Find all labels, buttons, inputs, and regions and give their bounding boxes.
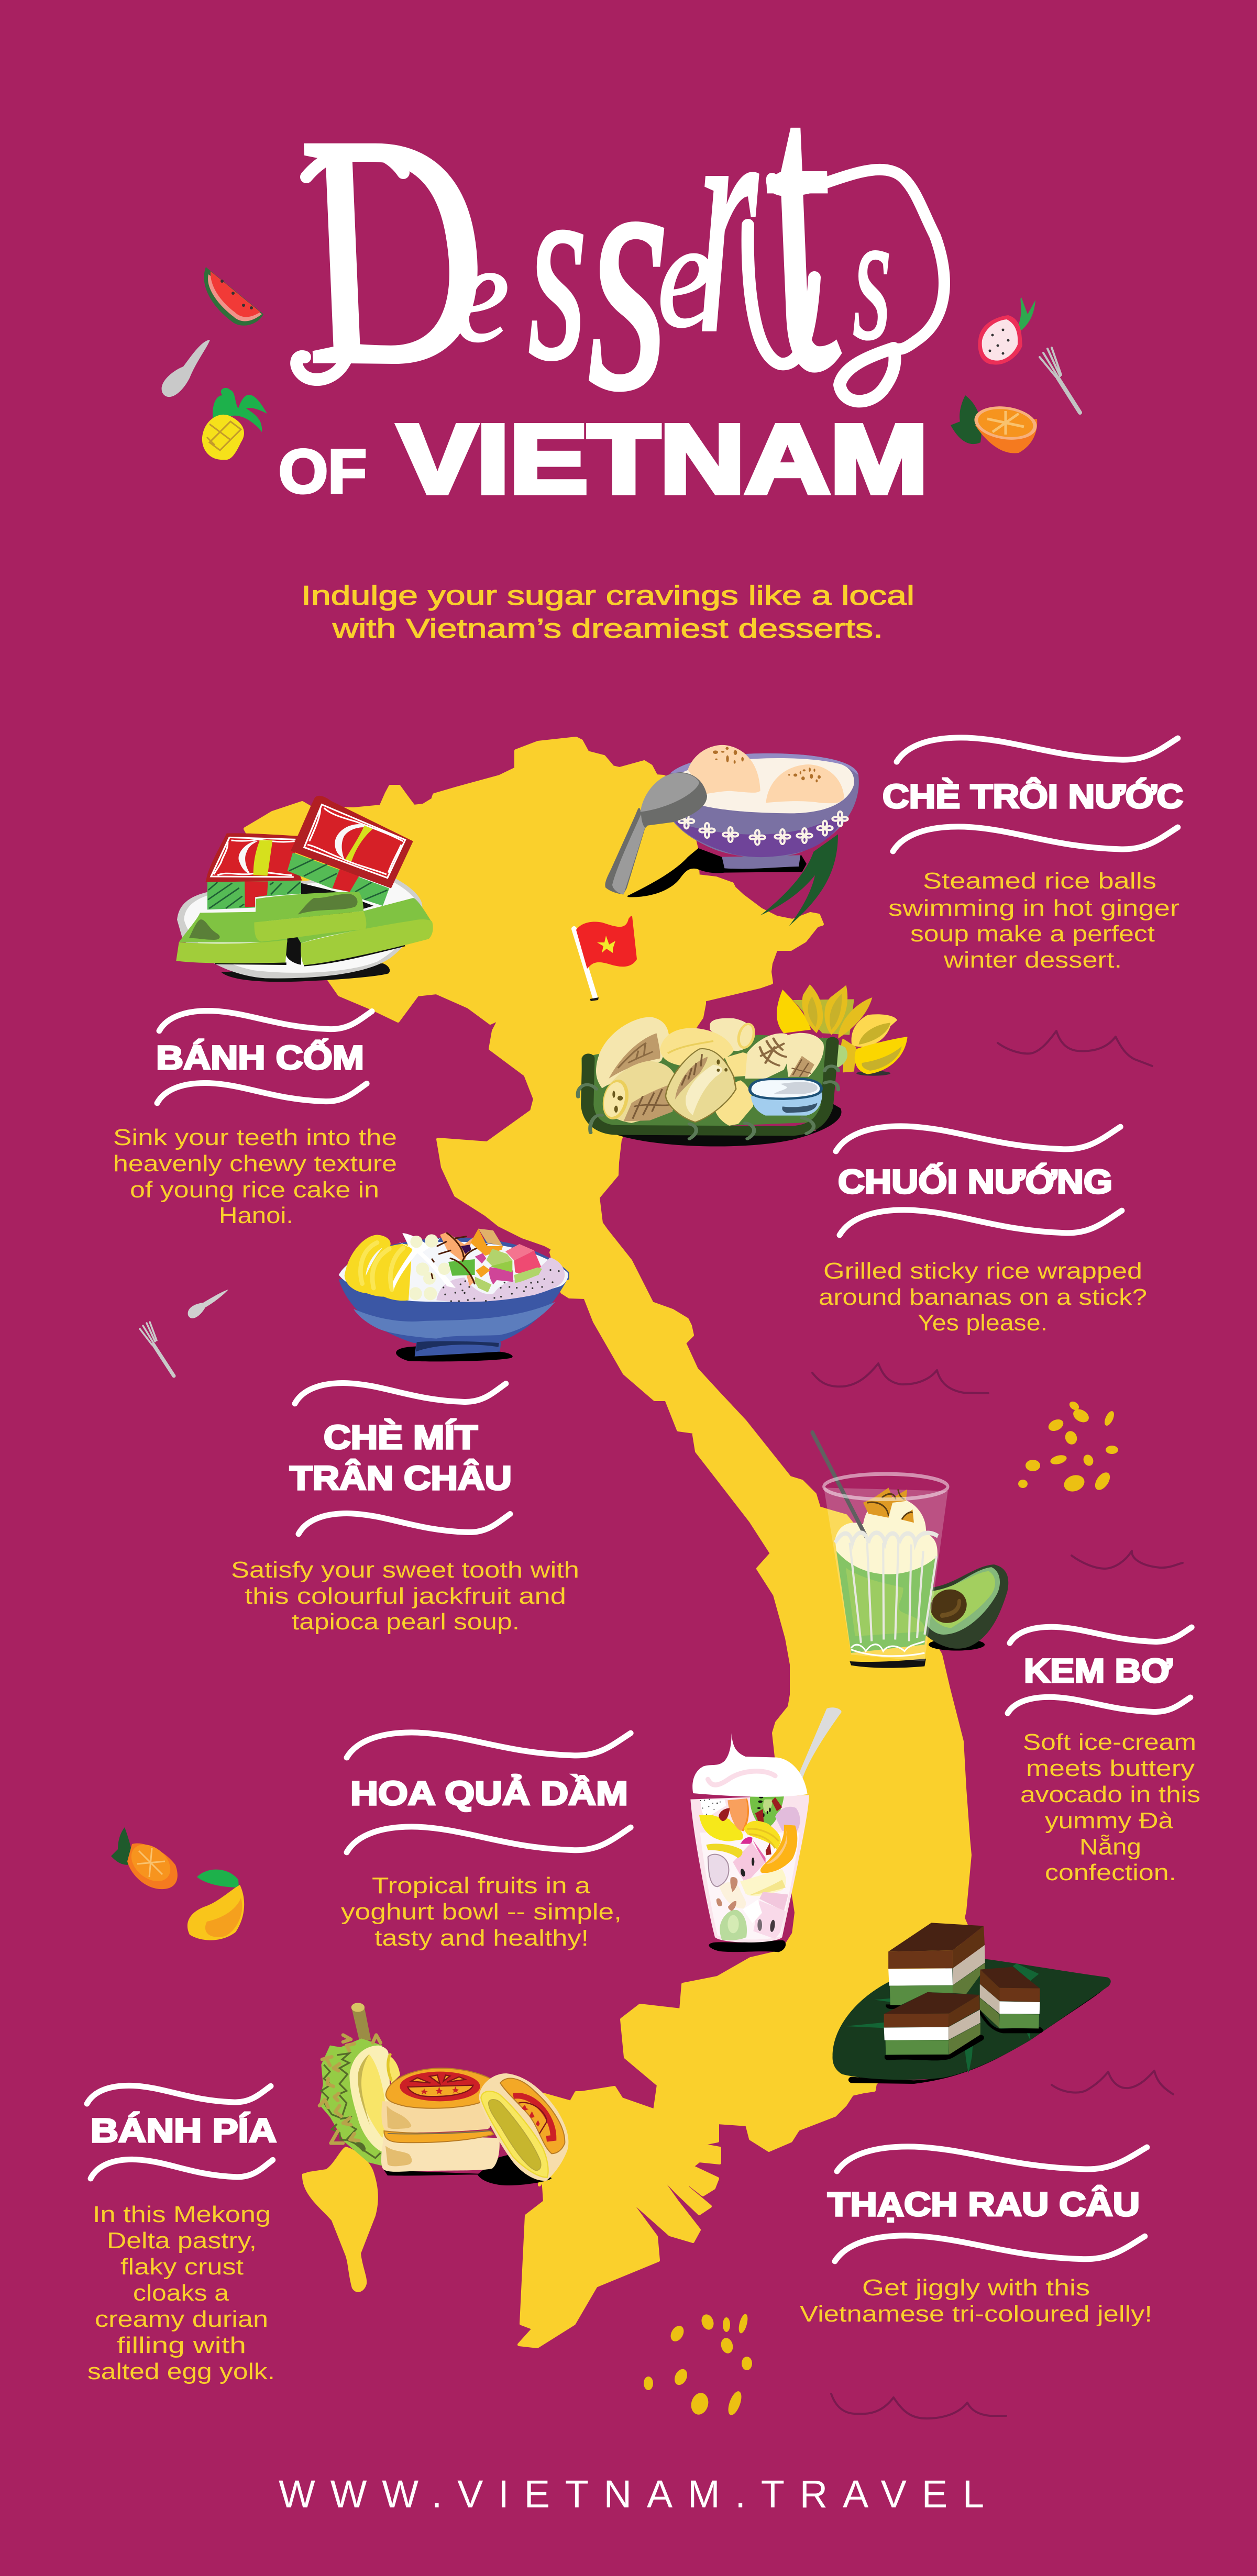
description: Soft ice-cream — [1023, 1729, 1196, 1755]
tray — [581, 1035, 836, 1131]
illustration: banh pia and durian — [319, 2003, 568, 2185]
cake shadows — [885, 2004, 1043, 2060]
description — [888, 868, 1179, 973]
icon: spoon small — [188, 1290, 228, 1318]
description: Tropical fruits in a — [372, 1873, 591, 1898]
spoon and bowl shadow — [627, 848, 807, 897]
heading: Vietnam: VIETNAM — [398, 405, 928, 514]
description — [341, 1873, 622, 1951]
heading: Desserts: s — [588, 79, 669, 462]
illustration: chuoi nuong tray — [578, 984, 908, 1147]
map of Vietnam — [245, 738, 970, 2347]
decorative swash top — [295, 1383, 506, 1404]
description: Grilled sticky rice wrapped — [823, 1258, 1142, 1284]
description: Nẵng — [1079, 1834, 1141, 1860]
decorative swash bottom — [893, 827, 1178, 851]
icon: dragon fruit — [978, 297, 1035, 365]
panel: hoa qua dam — [341, 1733, 631, 1951]
fruit pieces — [699, 1792, 800, 1940]
heading: CHÈ TRÔI NƯỚC — [883, 777, 1183, 815]
pastry stamp — [400, 2072, 480, 2101]
description — [800, 2275, 1152, 2327]
illustration: hoa qua dam glass — [690, 1707, 842, 1952]
heading: CHUỐI NƯỚNG — [838, 1163, 1112, 1201]
cut pastry — [479, 2073, 568, 2181]
decorative swash bottom — [835, 2236, 1145, 2261]
avocado — [923, 1564, 1008, 1651]
icon: watermelon — [204, 267, 263, 326]
heading: Desserts: e — [454, 215, 510, 371]
subtitle — [301, 581, 914, 644]
description: confection. — [1045, 1860, 1176, 1885]
decorative crumbs upper — [1018, 1400, 1118, 1494]
plate shadow — [221, 963, 390, 982]
panel: che troi nuoc — [883, 738, 1183, 973]
heading: Desserts: t — [730, 0, 869, 457]
heading: Desserts: D — [262, 68, 512, 433]
decorative swash top — [1010, 1627, 1192, 1643]
description: Satisfy your sweet tooth with — [231, 1557, 579, 1583]
decorative swash bottom — [347, 1827, 631, 1852]
banana leaf — [833, 1959, 1111, 2080]
leaf shadow — [848, 1981, 1110, 2084]
left wrapped cake — [205, 833, 302, 909]
panel: banh pia — [87, 2085, 277, 2384]
bowl foot — [722, 855, 800, 869]
panel: thach rau cau — [800, 2147, 1152, 2327]
bowl rim — [670, 753, 858, 775]
decorative crumbs lower — [644, 2313, 752, 2417]
illustration: che troi nuoc bowl — [605, 745, 859, 926]
icon: mango — [188, 1870, 244, 1940]
description: this colourful jackfruit and — [245, 1583, 566, 1609]
decorative swash top — [836, 1126, 1120, 1151]
dipping bowl — [750, 1079, 822, 1116]
decorative swash bottom — [157, 1083, 367, 1103]
description — [819, 1258, 1147, 1336]
heading: Desserts: e — [657, 191, 713, 359]
glass shadow — [850, 1659, 926, 1668]
bowl body — [669, 753, 859, 858]
description: creamy durian — [95, 2306, 268, 2332]
rice ball right — [766, 764, 844, 803]
nut topping — [863, 1487, 914, 1523]
cake front — [884, 1992, 980, 2055]
heading: CHÈ MÍT — [324, 1418, 478, 1456]
bowl shadow — [396, 1347, 513, 1361]
decorative swash top — [897, 738, 1178, 762]
green rice cakes — [176, 892, 433, 965]
description: heavenly chewy texture — [113, 1151, 397, 1176]
icon: fork small — [140, 1322, 174, 1376]
description: around bananas on a stick? — [819, 1284, 1147, 1310]
right wrapped cake — [288, 796, 413, 906]
icon: Vietnamese flag — [574, 916, 637, 1001]
description: swimming in hot ginger — [888, 895, 1179, 921]
description: filling with — [117, 2333, 246, 2358]
heading: BÁNH CỐM — [156, 1039, 364, 1076]
whipped cream — [692, 1733, 808, 1797]
description: flaky crust — [120, 2254, 244, 2280]
heading: Desserts: r — [697, 35, 760, 401]
dessert filling — [339, 1229, 568, 1302]
decorative swash bottom — [91, 2159, 273, 2179]
icon: spoon — [162, 340, 210, 397]
description: of young rice cake in — [130, 1177, 379, 1203]
illustration: che mit tran chau bowl — [339, 1229, 569, 1361]
heading: TRÂN CHÂU — [290, 1459, 512, 1497]
description: Steamed rice balls — [923, 868, 1156, 894]
description: yummy Đà — [1045, 1808, 1174, 1834]
illustration: kem bo glass and avocado — [812, 1433, 1008, 1668]
panel: chuoi nuong — [819, 1126, 1147, 1336]
panel: kem bo — [1008, 1627, 1200, 1885]
stacked pastry — [381, 2068, 500, 2172]
heading: BÁNH PÍA — [91, 2112, 277, 2149]
heading: HOA QUẢ DẦM — [350, 1774, 628, 1812]
bowl — [339, 1237, 569, 1357]
heading: Desserts: s — [853, 174, 891, 377]
description: yoghurt bowl -- simple, — [341, 1899, 622, 1925]
tray shadow — [615, 1103, 842, 1147]
subtitle: Indulge your sugar cravings like a local — [301, 581, 914, 611]
decorative swash top — [159, 1011, 372, 1031]
glass — [690, 1795, 809, 1942]
description: cloaks a — [133, 2280, 229, 2306]
description: Vietnamese tri-coloured jelly! — [800, 2301, 1152, 2327]
description: meets buttery — [1026, 1756, 1195, 1781]
subtitle: with Vietnam’s dreamiest desserts. — [332, 614, 883, 644]
description: Delta pastry, — [107, 2228, 257, 2253]
icon: orange — [951, 395, 1039, 453]
description: tasty and healthy! — [374, 1925, 589, 1951]
description: salted egg yolk. — [87, 2359, 275, 2384]
description — [87, 2202, 275, 2384]
banana bunch — [777, 984, 908, 1076]
description: soup make a perfect — [910, 921, 1155, 947]
durian — [319, 2003, 400, 2166]
grilled bananas — [596, 1017, 824, 1126]
pandan leaves — [760, 834, 838, 926]
heading: of: OF — [279, 437, 367, 506]
decorative swash top — [837, 2147, 1147, 2171]
glass shadow — [709, 1940, 786, 1952]
cake back — [888, 1923, 985, 2005]
heading — [290, 1418, 512, 1497]
icon: orange small — [111, 1827, 178, 1889]
panel: che mit tran chau — [231, 1383, 579, 1635]
description: winter dessert. — [943, 947, 1122, 973]
drink — [824, 1487, 948, 1661]
pastry shadow — [384, 2155, 552, 2185]
heading: Desserts: s — [528, 119, 587, 415]
description: In this Mekong — [93, 2202, 271, 2227]
illustration: thach rau cau jelly on leaf — [833, 1923, 1111, 2084]
description: Get jiggly with this — [862, 2275, 1090, 2301]
spoon — [812, 1433, 866, 1536]
description: tapioca pearl soup. — [292, 1609, 520, 1635]
footer url: WWW.VIETNAM.TRAVEL — [279, 2472, 984, 2516]
spoon — [786, 1707, 842, 1805]
plate — [177, 873, 422, 979]
icon: fork — [1040, 348, 1080, 413]
icon: pineapple — [202, 388, 267, 460]
glass flutes and rim — [824, 1474, 948, 1656]
soup — [682, 758, 854, 813]
description — [113, 1125, 397, 1228]
description: Hanoi. — [219, 1203, 293, 1228]
leaf spikes — [845, 1963, 1039, 2073]
decorative swash top — [87, 2085, 271, 2104]
purple band — [674, 813, 843, 857]
panel: banh com — [113, 1011, 397, 1228]
cake right — [980, 1967, 1040, 2028]
description: avocado in this — [1020, 1782, 1200, 1807]
description — [1020, 1729, 1200, 1885]
description — [231, 1557, 579, 1635]
heading: Desserts — [262, 0, 944, 462]
heading: THẠCH RAU CÂU — [828, 2185, 1140, 2223]
rice ball left — [688, 745, 760, 794]
decorative swash top — [347, 1733, 631, 1758]
spoon — [605, 772, 707, 894]
flower pattern — [679, 812, 848, 845]
illustration: banh com plate — [176, 796, 433, 982]
heading: KEM BƠ — [1024, 1652, 1172, 1690]
description: Sink your teeth into the — [113, 1125, 397, 1150]
description: Yes please. — [918, 1310, 1048, 1336]
decorative swash bottom — [299, 1514, 510, 1534]
decorative swash bottom — [1008, 1697, 1190, 1713]
title — [262, 0, 944, 514]
decorative swash bottom — [840, 1210, 1122, 1235]
